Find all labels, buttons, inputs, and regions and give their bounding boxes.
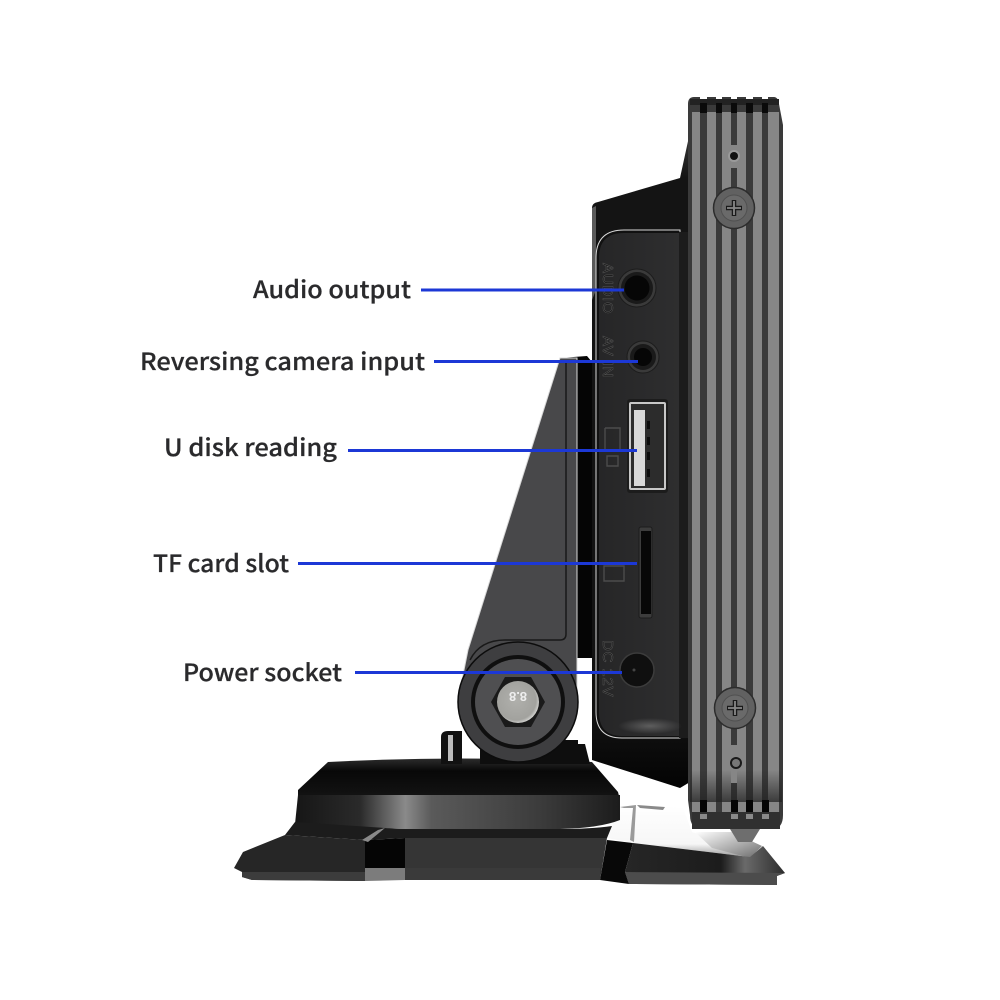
silver edge strips: [620, 805, 636, 842]
callout: TF card slot: TF card slot: [153, 544, 289, 579]
rib shading at bottom: [690, 770, 782, 802]
callout: power socket: [183, 653, 622, 688]
base plate right: [625, 843, 785, 885]
base bottom plate left: [234, 835, 365, 881]
callout: reversing camera input: Reversing camera input: [140, 342, 426, 377]
stand arm: [458, 356, 592, 700]
base notch right: [600, 840, 633, 884]
bottom grille windows: [692, 800, 780, 829]
callout: audio output: Audio output: [253, 270, 412, 305]
top screw: [714, 188, 754, 228]
light ribs: [692, 112, 779, 812]
mount collar: [295, 795, 620, 829]
mount dome: [298, 758, 620, 800]
collar foot: [285, 822, 612, 840]
panel glare: [618, 718, 682, 734]
base notch left: [365, 838, 405, 868]
neck: [480, 740, 590, 764]
screen body side: [688, 97, 783, 829]
silver plate reflection: [695, 832, 762, 858]
callout: audio output: [253, 270, 624, 305]
bottom pinhole: [730, 757, 742, 769]
label: DC 12V: DC 12V: [599, 640, 616, 697]
adjustment knob: [441, 731, 462, 764]
housing left highlight: [592, 206, 596, 300]
port panel: [596, 230, 689, 738]
callout: power socket: Power socket: [183, 653, 343, 688]
USB symbol: [605, 428, 620, 466]
screen foot: [730, 829, 760, 842]
callout: reversing camera input: [140, 342, 638, 377]
top grille windows: [690, 99, 779, 113]
TF card slot: [639, 527, 652, 618]
device rear housing: [592, 132, 690, 788]
reflective white shine: [607, 805, 750, 857]
audio jack: [618, 269, 656, 307]
USB port: [627, 399, 668, 493]
silver top line: [637, 805, 665, 810]
top teeth: [700, 97, 768, 99]
top pinhole: [728, 150, 740, 162]
base plate centre: [405, 838, 607, 880]
callout: U disk reading: U disk reading: [164, 428, 337, 463]
TF symbol: [604, 566, 624, 581]
label: AUDIO: AUDIO: [599, 263, 616, 315]
white gap sliver: [578, 658, 591, 744]
DC socket: [620, 653, 654, 687]
bottom screw: [714, 688, 756, 728]
panel inner right edge: [679, 232, 689, 738]
pivot joint with bolt: [458, 642, 578, 762]
phone stand base: [234, 758, 785, 885]
AV jack: [627, 341, 659, 373]
label: AV IN: AV IN: [599, 336, 616, 378]
hex bolt: 8.8: [509, 689, 527, 704]
callout: TF card slot: [153, 544, 637, 579]
callout: U disk reading: [164, 428, 637, 463]
centre rib gaps: [731, 145, 737, 783]
